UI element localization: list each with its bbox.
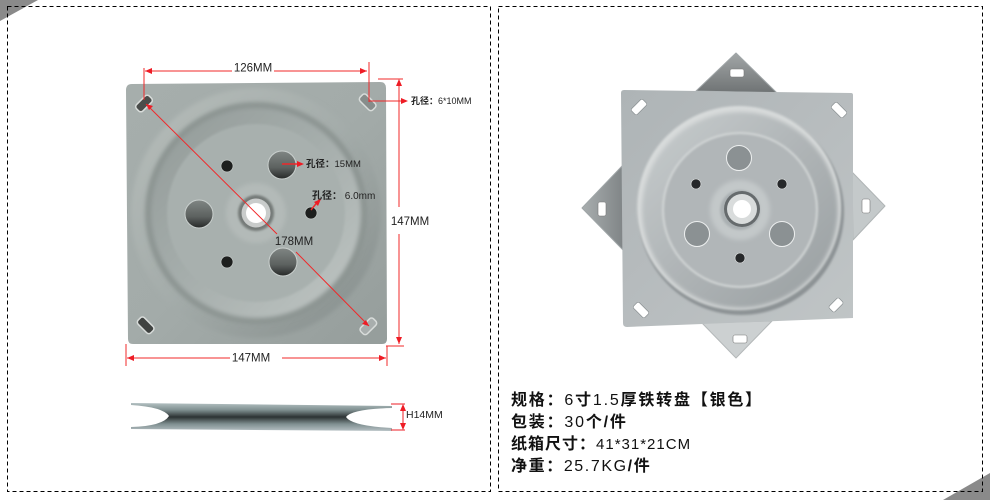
label: slot size: 孔径：6*10MM <box>411 95 472 106</box>
product photo: swivel plate <box>582 53 885 358</box>
concentric rings <box>637 106 844 315</box>
dimension arrowheads <box>127 68 408 361</box>
label: H14MM: H14MM <box>406 409 443 421</box>
bottom plate right wedge <box>852 172 885 240</box>
large holes <box>684 146 794 246</box>
specification text block <box>511 390 763 475</box>
label: large hole: 孔径：15MM <box>306 158 361 170</box>
spec line: packing: 包装：30个/件 <box>511 412 628 431</box>
label: small hole: 孔径： 6.0mm <box>312 189 375 202</box>
top-view plate with dimensions <box>126 62 472 366</box>
plate body <box>126 82 387 344</box>
large holes <box>185 151 297 276</box>
label: 147MM width: 147MM <box>232 352 270 364</box>
corner triangle top-left <box>0 0 38 21</box>
spec line: net weight: 净重：25.7KG/件 <box>511 456 651 475</box>
dimension lines <box>126 62 404 366</box>
side profile <box>131 403 392 431</box>
bottom plate slots <box>598 69 870 343</box>
small holes <box>221 160 317 268</box>
side-view plate with height dimension <box>131 403 443 431</box>
bottom plate left wedge <box>582 165 624 251</box>
bottom plate lower wedge <box>702 321 772 358</box>
spec line: model: 规格：6寸1.5厚铁转盘【银色】 <box>511 390 763 409</box>
corner triangle bottom-right <box>943 473 990 500</box>
bottom plate top wedge <box>696 53 777 93</box>
spec line: carton size: 纸箱尺寸：41*31*21CM <box>511 434 691 453</box>
top plate <box>621 90 853 327</box>
panel: product photo and specs <box>498 6 982 492</box>
height dimension <box>391 404 405 430</box>
panel: dimensions drawing <box>8 6 490 492</box>
label: 126MM: 126MM <box>234 62 272 74</box>
mounting slots <box>134 93 378 336</box>
label: 178MM: 178MM <box>275 236 313 248</box>
concentric rings <box>131 88 381 338</box>
label: 147MM height: 147MM <box>391 216 429 228</box>
small holes <box>691 179 787 263</box>
top plate slots <box>631 99 847 318</box>
height arrowheads <box>400 404 406 430</box>
